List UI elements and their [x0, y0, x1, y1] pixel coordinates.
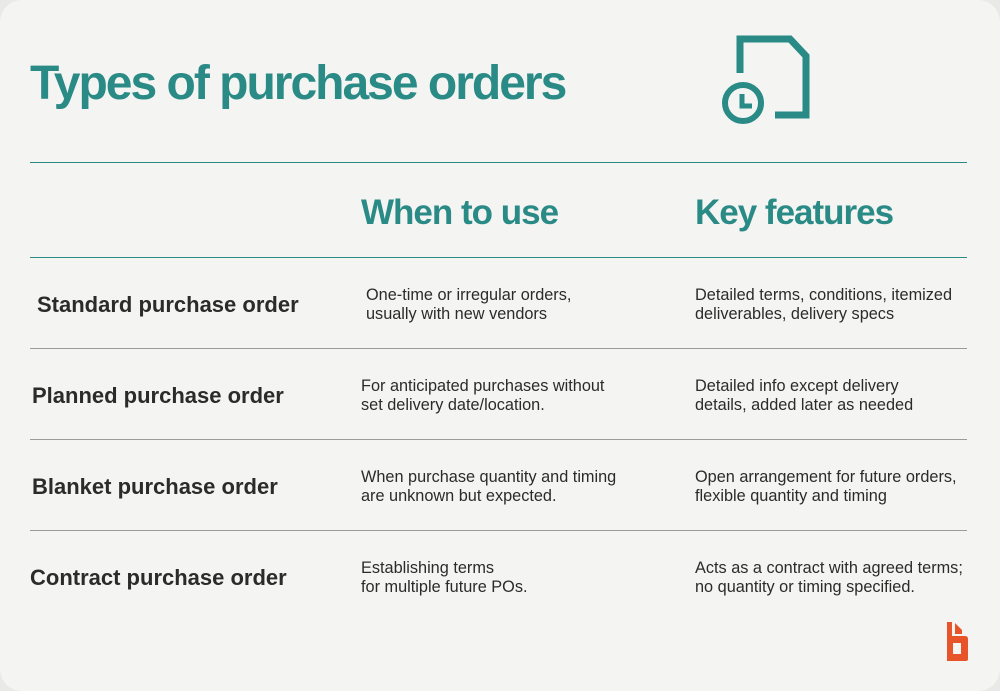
row: planned: Detailed info except delivery [695, 377, 899, 395]
title: Types of purchase orders [30, 57, 565, 110]
row: standard [37, 286, 952, 323]
row: blanket: When purchase quantity and timing [361, 468, 616, 486]
row: contract: no quantity or timing specified. [695, 578, 915, 596]
row: contract: Establishing terms [361, 559, 494, 577]
heading: key features: Key features [695, 193, 893, 232]
row: blanket: are unknown but expected. [361, 487, 557, 505]
row: standard: Detailed terms, conditions, itemized [695, 286, 952, 304]
row: contract: Acts as a contract with agreed terms; [695, 559, 963, 577]
row: standard: deliverables, delivery specs [695, 305, 894, 323]
row: standard: usually with new vendors [366, 305, 547, 323]
row: blanket: Blanket purchase order [32, 474, 278, 499]
heading: when to use: When to use [361, 193, 558, 232]
icon: document with clock [722, 36, 810, 124]
row: contract [30, 559, 963, 596]
row: standard: One-time or irregular orders, [366, 286, 571, 304]
row: blanket [32, 468, 957, 505]
row: planned [32, 377, 913, 414]
row: contract: Contract purchase order [30, 565, 287, 590]
row: contract: for multiple future POs. [361, 578, 528, 596]
row: planned: set delivery date/location. [361, 396, 545, 414]
row: planned: For anticipated purchases without [361, 377, 604, 395]
logo [947, 622, 968, 661]
row: blanket: Open arrangement for future orders, [695, 468, 957, 486]
row: blanket: flexible quantity and timing [695, 487, 887, 505]
row: planned: Planned purchase order [32, 383, 284, 408]
row: standard: Standard purchase order [37, 292, 299, 317]
row: planned: details, added later as needed [695, 396, 913, 414]
